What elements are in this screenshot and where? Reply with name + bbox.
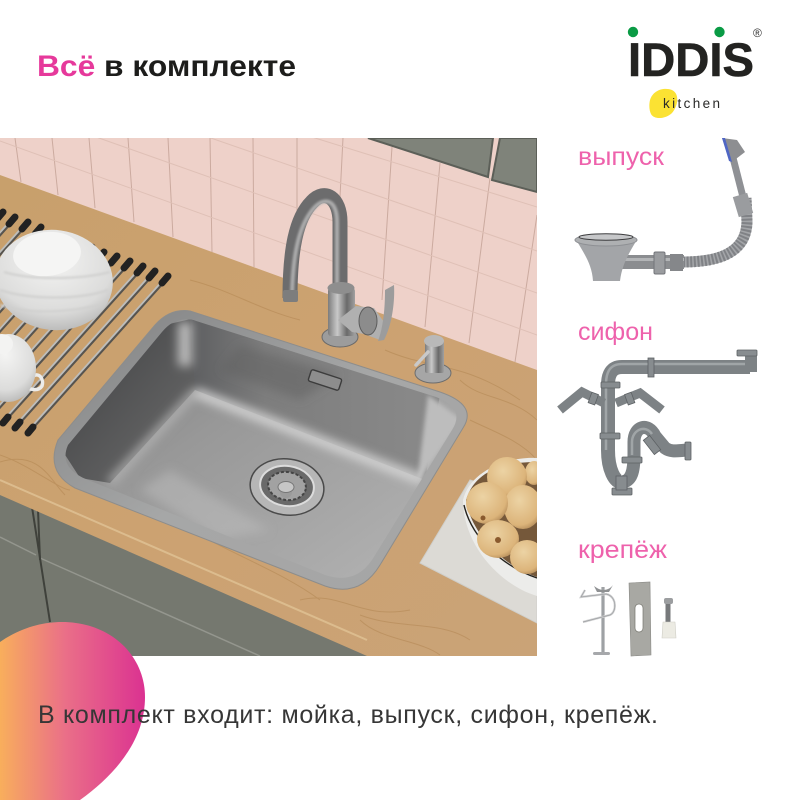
drain rim	[575, 234, 637, 246]
left branch	[560, 392, 604, 410]
faucet mixer body	[338, 306, 384, 340]
product: drain outlet	[575, 138, 747, 281]
yellow spot	[649, 89, 677, 118]
logo green dots	[628, 27, 725, 37]
worktop	[0, 175, 537, 656]
base cabinets	[0, 495, 367, 656]
fruit bowl	[463, 457, 544, 596]
sink rim	[54, 311, 467, 589]
overflow pipe	[731, 150, 743, 197]
soap dispenser	[415, 335, 451, 383]
title: Всё в комплекте	[37, 50, 296, 83]
drain funnel	[578, 243, 635, 281]
faucet	[283, 196, 394, 347]
upper elbow	[745, 355, 757, 372]
white cup	[0, 334, 43, 402]
top collar	[737, 350, 757, 356]
screw with sleeve	[662, 598, 676, 638]
product: siphon	[560, 350, 757, 495]
reflection	[110, 322, 422, 540]
tiled wall	[0, 138, 537, 370]
gradient blob	[0, 622, 145, 800]
registered mark: ®	[753, 26, 762, 40]
wall cabinets	[368, 138, 537, 192]
right branch	[616, 393, 662, 410]
trap loop	[621, 427, 690, 482]
bottom caption: В комплект входит: мойка, выпуск, сифон, крепёж.	[38, 701, 658, 729]
photo: kitchen sink on worktop	[0, 138, 537, 656]
flexible hose	[683, 198, 747, 262]
napkin	[420, 480, 537, 623]
overflow nozzle	[722, 138, 745, 162]
nut	[654, 252, 665, 274]
overflow slot	[308, 369, 342, 391]
pipe collars	[588, 358, 691, 495]
drain strainer	[249, 458, 325, 516]
product: fasteners	[581, 582, 676, 656]
logo wordmark: IDDIS	[628, 33, 754, 86]
metal plate with slot	[629, 582, 651, 656]
logo: IDDIS kitchen	[628, 26, 762, 118]
basin floor	[66, 322, 374, 577]
right wall	[417, 395, 456, 478]
dish drying rack	[0, 212, 168, 433]
label: крепёж: крепёж	[578, 536, 667, 564]
kitchen wordmark: kitchen	[663, 96, 720, 111]
main pipe	[608, 367, 750, 482]
label: выпуск: выпуск	[578, 143, 665, 171]
label: сифон: сифон	[578, 318, 653, 346]
apricots	[466, 457, 544, 574]
back wall	[190, 316, 440, 480]
sink basin	[66, 320, 456, 577]
horizontal pipe	[618, 255, 684, 269]
clamp	[581, 585, 615, 655]
white bowl	[0, 230, 113, 330]
faucet lever	[378, 285, 394, 341]
left wall	[60, 318, 195, 483]
